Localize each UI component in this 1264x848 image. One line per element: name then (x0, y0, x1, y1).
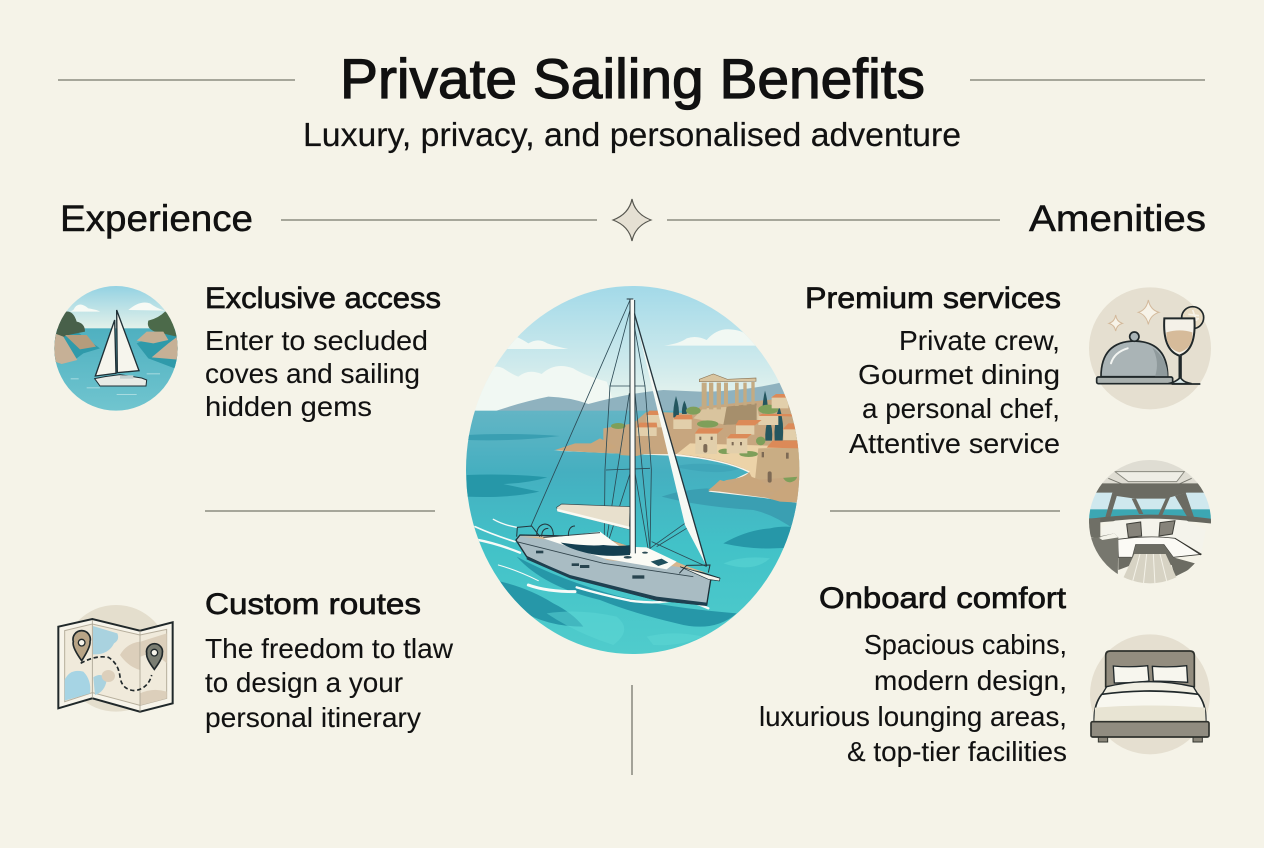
text block: exclusive access (205, 325, 428, 422)
icon: four-point star (613, 199, 651, 241)
clouds (478, 329, 756, 404)
icon: cloche and wine glass (1089, 287, 1211, 409)
text block: onboard comfort: modern design, (874, 665, 1067, 696)
text block: custom routes: The freedom to tlaw (205, 633, 454, 664)
heading: exclusive access: Exclusive access (205, 282, 441, 315)
section heading: experience: Experience (60, 198, 253, 239)
side cabinet (1091, 533, 1118, 574)
text block: premium services (849, 325, 1060, 459)
village houses (636, 394, 799, 483)
boat hull (516, 535, 720, 605)
sea (460, 411, 807, 657)
icon: route map (58, 605, 173, 712)
boom with furled sail (557, 504, 630, 529)
cypress trees (673, 391, 783, 441)
text block: exclusive access: hidden gems (205, 391, 372, 422)
boat wake (475, 519, 708, 608)
rigging (531, 300, 707, 567)
heading: onboard comfort: Onboard comfort (819, 582, 1067, 615)
panel: exclusive access (50, 282, 441, 422)
subtitle: Luxury, privacy, and personalised adventure (303, 116, 961, 153)
shoreline (553, 447, 800, 503)
text block: premium services: Gourmet dining (858, 359, 1060, 390)
water shading (467, 475, 800, 627)
text block: onboard comfort: Spacious cabins, (864, 629, 1067, 660)
floor and base (1118, 545, 1195, 577)
text block: onboard comfort: & top-tier facilities (847, 736, 1067, 767)
icon: yacht lounge interior (1085, 458, 1215, 585)
railings (517, 524, 710, 573)
jib sail (634, 313, 706, 565)
window frames (1096, 483, 1204, 499)
title: Private Sailing Benefits (340, 47, 925, 110)
icon: bed (1090, 634, 1210, 754)
central illustration: sailboat and coastal town (460, 280, 807, 657)
mast (630, 299, 635, 554)
text block: premium services: a personal chef, (862, 393, 1060, 424)
text block: onboard comfort (759, 629, 1067, 767)
windows (1090, 492, 1210, 510)
ceiling (1102, 460, 1198, 484)
text block: premium services: Private crew, (899, 325, 1060, 356)
panel: onboard comfort (759, 582, 1210, 767)
greenery (611, 405, 797, 482)
section heading: amenities: Amenities (1029, 198, 1206, 239)
icon: sailboat in a cove (54, 286, 178, 411)
heading: custom routes: Custom routes (205, 588, 421, 621)
text block: exclusive access: Enter to secluded (205, 325, 428, 356)
temple (693, 374, 760, 425)
text block: custom routes: personal itinerary (205, 702, 421, 733)
distant hills (497, 380, 800, 413)
text block: exclusive access: coves and sailing (205, 358, 420, 389)
sky (493, 286, 780, 398)
panel: custom routes (58, 588, 454, 733)
text block: onboard comfort: luxurious lounging areas, (759, 701, 1067, 732)
text block: custom routes (205, 633, 454, 733)
text block: custom routes: to design a your (205, 667, 403, 698)
text block: premium services: Attentive service (849, 428, 1060, 459)
rocks (560, 438, 800, 503)
panel: premium services (805, 282, 1211, 459)
heading: premium services: Premium services (805, 282, 1061, 315)
sofa (1114, 518, 1188, 522)
deck cabin (543, 532, 677, 569)
